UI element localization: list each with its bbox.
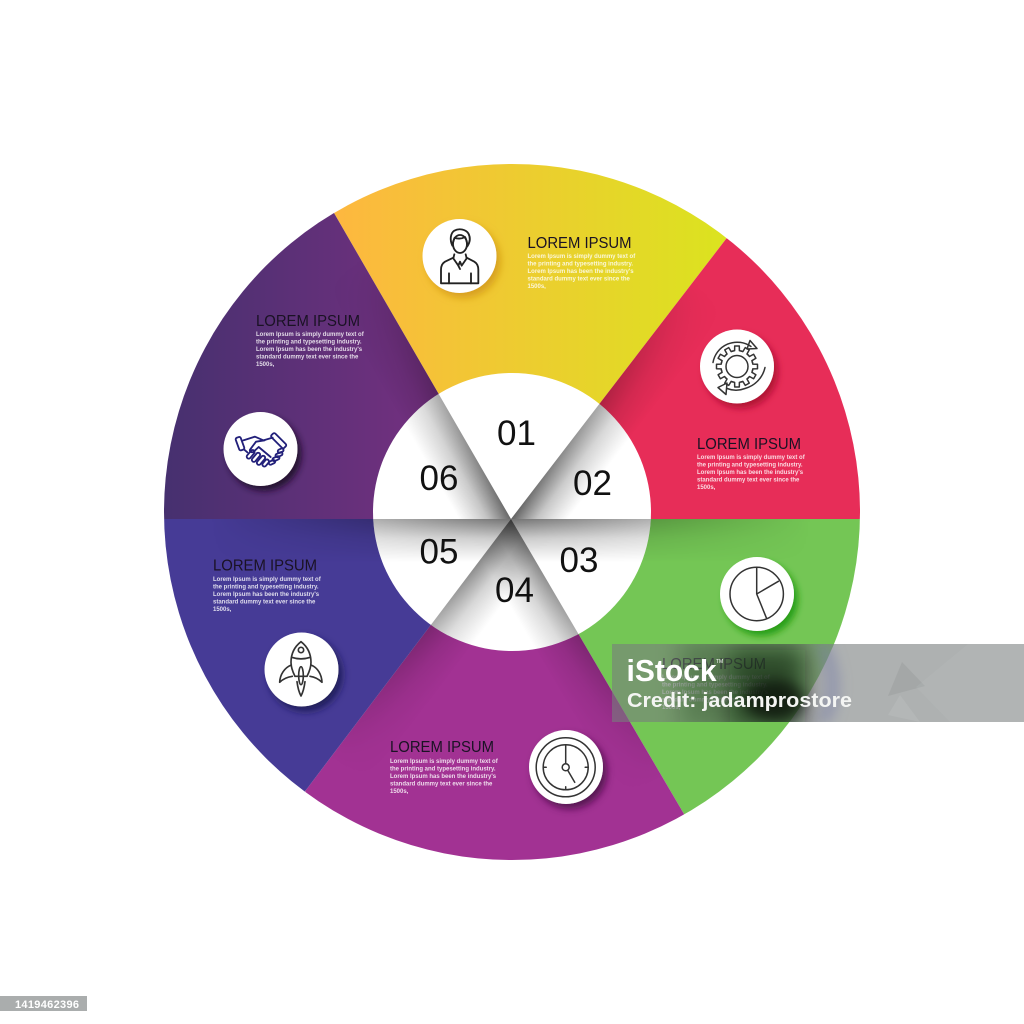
text block 6: 1500s,	[256, 362, 275, 368]
watermark credit: Credit: jadamprostore	[627, 689, 852, 712]
segment 1 yellow	[334, 164, 726, 404]
segment edge shadows	[248, 296, 782, 748]
text block 5: the printing and typesetting industry.	[213, 584, 319, 590]
image id tag	[0, 996, 87, 1011]
text block 4: Lorem Ipsum is simply dummy text of	[390, 759, 499, 765]
watermark logo: iStock	[626, 653, 717, 688]
text block 3: Lorem Ipsum is simply dummy text of	[662, 675, 771, 681]
text block 2: Lorem Ipsum has been the industry's	[697, 470, 804, 476]
text block 2: Lorem Ipsum is simply dummy text of	[697, 455, 806, 461]
text block 4: Lorem Ipsum has been the industry's	[390, 774, 497, 780]
text block 1	[528, 235, 636, 290]
icon: gear with arrows	[700, 330, 774, 404]
number 03: 03	[560, 541, 598, 580]
text block 2: the printing and typesetting industry.	[697, 462, 803, 468]
text block 3	[662, 656, 771, 711]
outer colored wheel	[164, 164, 860, 860]
watermark dark blotch	[670, 644, 921, 722]
text block 5	[213, 558, 322, 613]
icon: person	[422, 219, 496, 293]
text block 6: Lorem Ipsum is simply dummy text of	[256, 332, 365, 338]
text block 1: Lorem Ipsum has been the industry's	[528, 269, 634, 275]
text block 4: LOREM IPSUM	[390, 739, 494, 756]
text block 6: standard dummy text ever since the	[256, 354, 359, 360]
number 05: 05	[420, 532, 458, 572]
number 01: 01	[497, 414, 536, 453]
text block 2: LOREM IPSUM	[697, 436, 801, 453]
text block 1: 1500s,	[528, 284, 546, 290]
text block 2: standard dummy text ever since the	[697, 478, 800, 484]
segment 5 blue	[164, 519, 431, 792]
text block 5: LOREM IPSUM	[213, 558, 317, 574]
text block 1: the printing and typesetting industry.	[528, 262, 633, 268]
number 06: 06	[420, 459, 458, 498]
text block 6: the printing and typesetting industry.	[256, 340, 362, 346]
text block 3: Lorem Ipsum has been the industry's	[662, 690, 769, 696]
text block 5: Lorem Ipsum is simply dummy text of	[213, 577, 322, 583]
text block 2	[697, 436, 806, 491]
text block 4: 1500s,	[390, 789, 409, 795]
number 04: 04	[495, 571, 534, 610]
icon: rocket	[264, 632, 338, 706]
number 02: 02	[573, 464, 612, 503]
text block 1: standard dummy text ever since the	[528, 276, 631, 282]
text block 1: LOREM IPSUM	[528, 235, 632, 252]
watermark trademark: TM	[716, 659, 723, 665]
text block 6: LOREM IPSUM	[256, 313, 360, 330]
icon: pie chart	[720, 557, 794, 631]
text block 5: 1500s,	[213, 607, 232, 613]
text block 3: LOREM IPSUM	[662, 656, 766, 673]
text block 5: standard dummy text ever since the	[213, 600, 316, 606]
text block 5: Lorem Ipsum has been the industry's	[213, 592, 320, 598]
image id tag: 1419462396	[15, 999, 79, 1011]
icon: handshake	[224, 412, 298, 486]
text block 3: 1500s,	[662, 705, 681, 711]
text block 6: Lorem Ipsum has been the industry's	[256, 347, 363, 353]
segment 4 magenta	[305, 625, 684, 860]
text block 3: standard dummy text ever since the	[662, 698, 765, 704]
text block 2: 1500s,	[697, 485, 716, 491]
text block 1: Lorem Ipsum is simply dummy text of	[528, 254, 636, 260]
icon: clock	[529, 730, 603, 804]
segment 2 red	[600, 238, 860, 519]
text block 4	[390, 739, 499, 795]
text block 4: standard dummy text ever since the	[390, 782, 493, 788]
center hub	[373, 373, 651, 651]
text block 6	[256, 313, 365, 368]
text block 3: the printing and typesetting industry.	[662, 682, 768, 688]
text block 4: the printing and typesetting industry.	[390, 766, 496, 772]
segment 3 green	[578, 519, 860, 814]
watermark banner	[612, 644, 1024, 722]
segment 6 purple	[164, 213, 439, 519]
